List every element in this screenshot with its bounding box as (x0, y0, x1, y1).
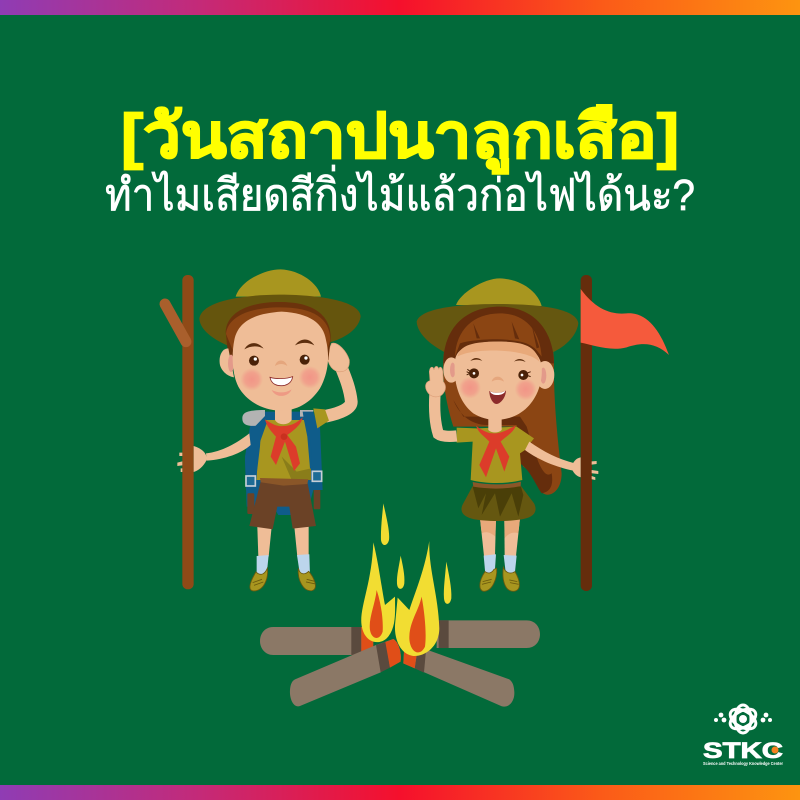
right arm and hand (525, 442, 598, 480)
neckerchief (476, 426, 516, 477)
long hair back (443, 307, 562, 495)
skirt pleats (473, 487, 523, 517)
title: [วันสถาปนาลูกเสือ] (121, 102, 679, 174)
left arm and hand (177, 433, 251, 472)
neck (275, 407, 292, 424)
neck (488, 413, 502, 432)
front logs (290, 639, 514, 707)
legs and socks (480, 518, 520, 575)
backpack (242, 410, 323, 515)
skirt (461, 486, 536, 521)
legs and socks (257, 527, 310, 575)
right flame (395, 541, 439, 656)
logo dot (772, 746, 778, 754)
shoes (250, 568, 315, 591)
ears (443, 357, 554, 389)
hat (199, 269, 361, 349)
face (455, 342, 542, 420)
logo wordmark: STKC (703, 738, 783, 763)
logo atom icon (714, 705, 772, 733)
hat (417, 278, 578, 353)
shoes (480, 567, 519, 591)
campfire (260, 503, 540, 707)
face (233, 312, 328, 411)
boy scout with staff (165, 269, 361, 591)
girl scout with flag (417, 275, 669, 591)
flag pole (581, 275, 592, 591)
left flame (361, 542, 395, 642)
hair top (443, 307, 554, 363)
back logs (260, 620, 540, 655)
shorts (249, 482, 316, 529)
shirt (256, 420, 311, 480)
shirt (457, 427, 534, 483)
belt (260, 478, 308, 486)
hair (226, 302, 331, 360)
right sleeve and raised arm (313, 343, 351, 428)
subtitle: ทำไมเสียดสีกิ่งไม้แล้วก่อไฟได้นะ? (105, 164, 695, 220)
shirt shadow (282, 457, 311, 480)
neckerchief (265, 417, 303, 471)
bottom gradient bar (0, 785, 800, 800)
hair shadow (453, 400, 552, 493)
staff (165, 275, 194, 589)
logo tagline: Science and Technology Knowledge Center (703, 761, 783, 766)
STKC logo (703, 705, 783, 766)
straps (245, 412, 322, 490)
belt (473, 482, 521, 489)
flag (581, 289, 669, 355)
raised arm (426, 366, 457, 436)
ear (220, 348, 234, 377)
sparks (381, 503, 451, 604)
top gradient bar (0, 0, 800, 15)
bangs (455, 313, 542, 357)
